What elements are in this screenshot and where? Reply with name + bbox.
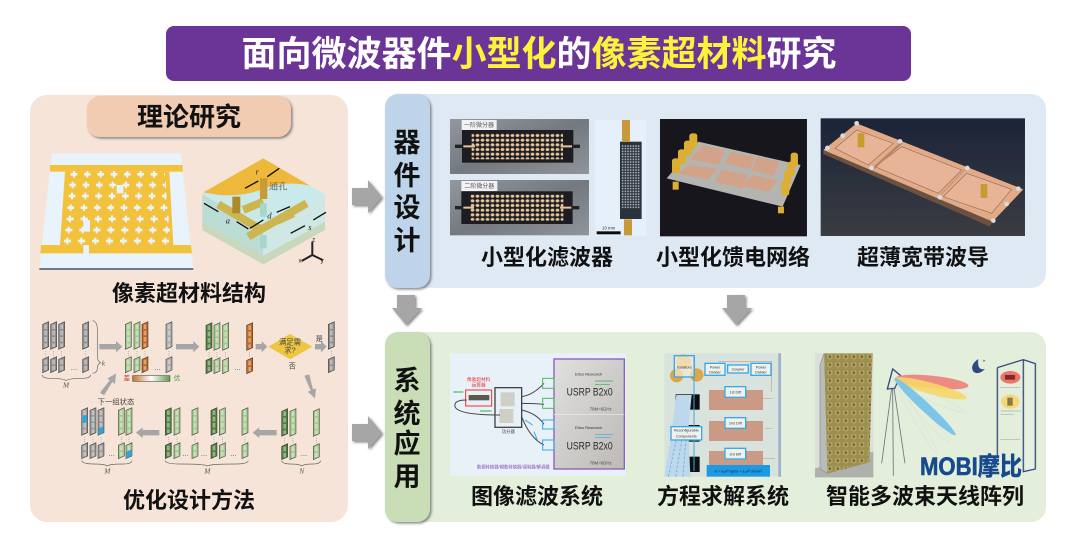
label: miniaturized feed network: 小型化馈电网络 [656,245,810,270]
sorted population [206,323,253,374]
photo: image filtering system: USRP B2x0 [567,387,613,399]
diagram: optimization flow: … [230,451,237,458]
panel: theory research [30,95,348,522]
title text: 面向微波器件小型化的像素超材料研究 [241,35,837,74]
photo: equation solving system: Reconfigurable [674,429,699,433]
heading: theory research: 理论研究 [137,102,241,132]
diagram: optimization flow: M [62,380,70,389]
beams [891,372,969,456]
sidebar: device design: 计 [394,226,420,256]
label: optimization design method: 优化设计方法 [123,488,255,513]
photo: miniaturized filters: 一阶微分器 [464,121,494,129]
signage tower [997,360,1035,472]
diagram: optimization flow: M [103,466,111,475]
photo: equation solving system: K = a₁eʲᶿ dy/dx + a₂eʲᶿ d²y/dx² [715,469,763,473]
photo: image filtering system: Ettus Research [575,372,602,377]
photo: equation solving system: Components [676,434,697,438]
illustration: multi-beam antenna scene [882,359,1035,476]
sidebar: device design [385,94,430,288]
diagram: pixel unit cell with via: s [308,222,312,232]
diagram: pixel unit cell with via: x [299,259,302,265]
sidebar: system application: 应 [394,429,420,459]
diagram: optimization flow: … [301,451,307,458]
sidebar: system application: 用 [394,462,420,492]
photo: image filtering system [450,353,626,476]
label: miniaturized filter: 小型化滤波器 [481,245,613,270]
photo: ultra-thin broadband waveguide [821,118,1025,236]
decision diamond: 求? [284,346,296,355]
photo: equation solving system: Divider [755,370,767,374]
label: ultra-thin broadband waveguide: 超薄宽带波导 [857,245,989,270]
photo: image filtering system: 功分器 [502,428,515,435]
label: equation solving system: 方程求解系统 [657,484,789,509]
sidebar: system application: 统 [394,399,420,429]
photo: equation solving system: 2nd Diff [729,422,743,426]
photo: antenna array panel [815,353,873,477]
diagram: pixel unit cell with via: d [267,210,272,220]
photo: equation solving system: 1st Diff [730,391,742,395]
diagram: optimization flow: … [182,451,189,458]
diagram: optimization flow: k [102,358,106,367]
diagram: optimization flow: N [298,466,305,475]
braces and labels [42,321,321,466]
diagram: optimization flow: … [201,451,207,458]
photo: equation solving system: Isolators [677,364,692,369]
selected group [282,409,319,460]
diagram: pixel metamaterial layout [39,153,193,269]
diagram: optimization flow: M [203,466,211,475]
sidebar: device design: 件 [394,161,420,191]
fitness colour bar: 差 [123,374,130,383]
sidebar: device design: 器 [394,128,420,158]
diagram: pixel unit cell with via [202,158,326,265]
arrow: device to system left [392,295,422,325]
heading: theory research [87,96,291,137]
photo: miniaturized filters [450,119,646,236]
photo: miniaturized feed network [660,119,807,236]
moon icon [972,359,985,373]
diagram: pixel unit cell with via: y [321,259,324,265]
label: image filtering system: 图像滤波系统 [471,484,603,509]
sidebar: system application [385,332,430,522]
photo: miniaturized filters: 10 mm [602,225,616,230]
decision diamond: 满足需 [279,338,301,347]
diagram: pixel unit cell with via: r [256,167,260,176]
sidebar: system application: 系 [394,366,420,396]
sidebar: device design: 设 [394,193,420,223]
panel: device design [385,94,1046,288]
diagram: optimization flow: … [108,451,115,458]
label: smart multi-beam antenna array: 智能多波束天线阵列 [826,484,1024,509]
photo: image filtering system: 运算器 [472,381,486,388]
decision diamond [268,334,312,359]
diagram: optimization flow: 否 [289,362,297,371]
diagram: optimization flow: 下一组状态 [98,398,135,407]
photo: image filtering system: 像素超材料 [467,376,491,383]
label: pixel metamaterial structure: 像素超材料结构 [112,281,266,306]
diagram: optimization flow: 是 [316,334,324,343]
diagram: pixel unit cell with via: z [312,238,315,244]
title banner [166,26,911,81]
photo: equation solving system [664,353,781,477]
diagram: optimization flow [42,321,334,475]
crossover group [165,408,248,459]
photo: equation solving system: Divider [709,370,721,374]
arrow: device to system right [722,295,752,325]
photo: miniaturized filters: 二阶微分器 [464,182,494,190]
arrow: theory to systems [352,416,382,449]
logo: MOBI: MOBI摩比 [920,453,1022,481]
photo: equation solving system: Power [710,365,721,369]
panel: system application [385,332,1046,522]
arrows [99,341,327,438]
output column [328,322,334,373]
diagram: pixel unit cell with via: a [226,215,230,225]
antenna on tripod [882,369,905,476]
fitness colour bar [123,374,181,383]
photo: equation solving system: Coupler [732,367,745,371]
fitness colour bar: 优 [174,374,181,383]
arrow: theory to devices [352,180,382,213]
evaluated population [125,322,172,373]
photo: equation solving system: 3rd Diff [729,452,742,456]
photo: image filtering system: 70M~6GHz [590,406,612,411]
photo: image filtering system: 数据转换器/模数转换器/调制器/解调器 [477,463,550,470]
diagram: optimization flow: … [154,365,161,372]
initial population [43,322,89,373]
diagram: pixel unit cell with via: 通孔 [269,180,288,192]
photo: equation solving system: Power [756,365,767,369]
photo: image filtering system: 70M~6GHz [590,461,612,466]
diagram: optimization flow: … [234,365,241,372]
diagram: optimization flow: … [71,365,77,372]
photo: image filtering system: USRP B2x0 [567,440,613,452]
photo: image filtering system: Ettus Research [575,425,602,430]
next state group [82,408,132,459]
